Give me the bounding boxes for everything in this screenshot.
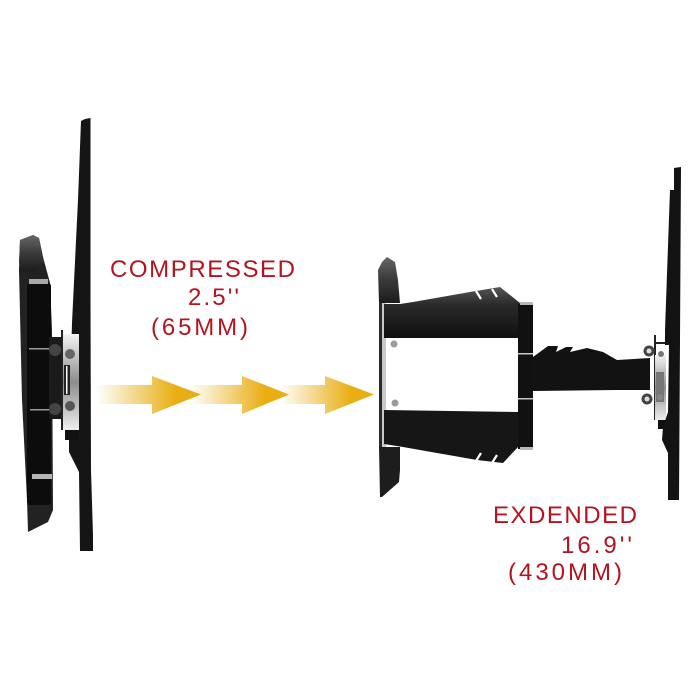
left wall plate [19,235,53,532]
text: extended label: (430MM) [508,559,622,586]
hinge pillar [518,304,533,449]
left collapsed arm [27,283,51,505]
left chrome bracket [62,334,79,430]
text: compressed label: COMPRESSED [110,256,295,283]
bolts [390,340,398,348]
text: extended label [493,502,637,586]
upper wall plate [378,257,400,303]
arrow 2 [190,376,289,414]
text: compressed label: (65MM) [151,314,248,341]
upper arm [384,287,520,338]
arrow 1 [97,376,201,414]
middle mount: wall plate and double arms [378,257,533,497]
lower arm [384,410,519,463]
text: compressed label [110,256,295,341]
arrow 3 [280,376,374,414]
left hinge block [49,337,63,419]
left TV panel silhouette [69,118,93,551]
left mount: compressed side view [19,118,93,551]
text: extended label: 16.9'' [561,532,632,559]
right TV bracket [642,335,667,429]
chrome strip [379,303,382,447]
text: extended label: EXDENDED [493,502,637,529]
right TV panel silhouette [662,167,681,500]
yellow arrows [97,376,374,414]
text: compressed label: 2.5'' [188,284,239,311]
right arm [533,346,650,391]
lower wall plate [379,447,400,497]
